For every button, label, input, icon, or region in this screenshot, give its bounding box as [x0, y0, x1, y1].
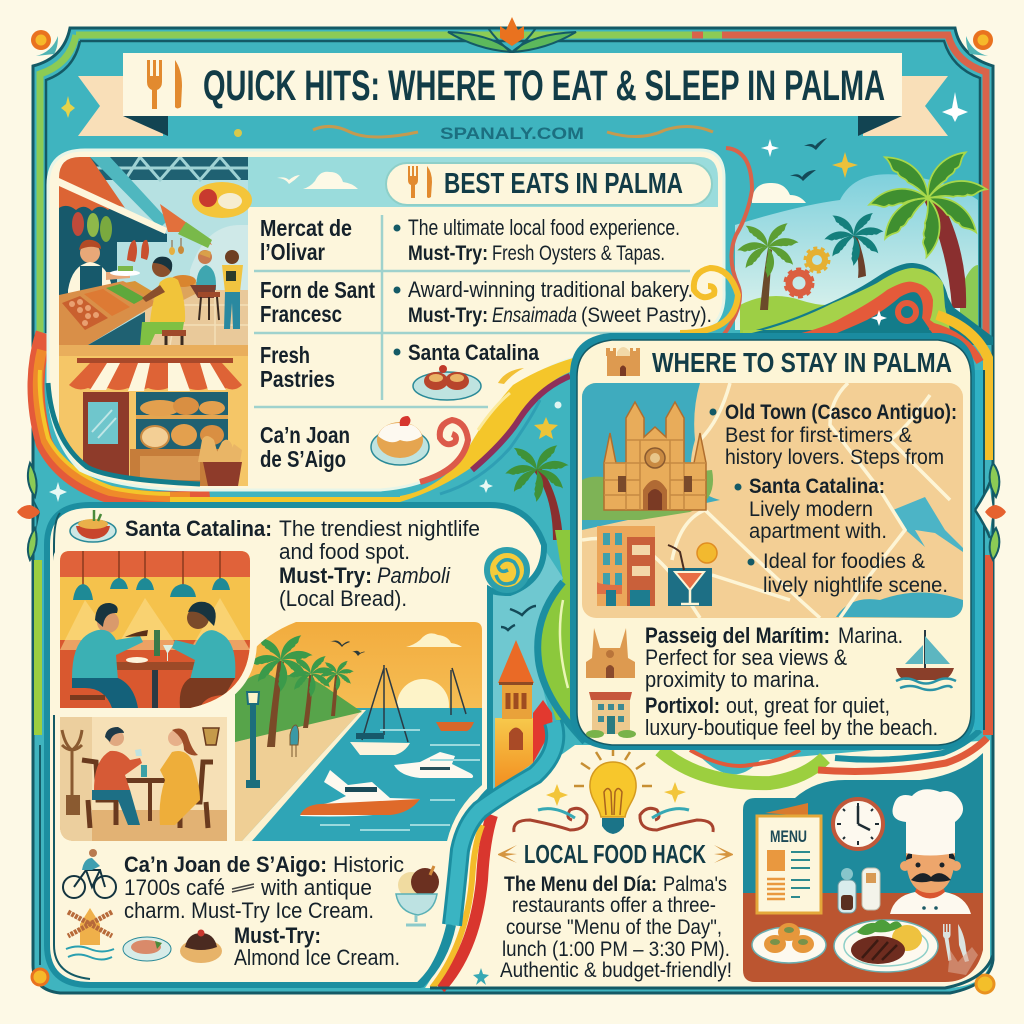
- scrollwork left: [514, 808, 587, 832]
- venue names: Ca’n Joan: [260, 422, 350, 448]
- icon: ice cream: [396, 866, 439, 925]
- ribbon tail left: [78, 76, 163, 136]
- icon: tart: [180, 930, 222, 963]
- stay text: portixol: Portixol:: [645, 693, 720, 718]
- red ribbon right of eats panel: [722, 148, 752, 337]
- venue names: Mercat de: [260, 215, 352, 241]
- stay text: old town: Best for first-timers &: [725, 424, 912, 447]
- stay text: passeig: Passeig del Marítim:: [645, 623, 830, 648]
- rainbow ribbon left and bottom of eats panel: [36, 333, 400, 500]
- icon: small house: [586, 692, 636, 738]
- outro text: ca'n joan: Almond Ice Cream.: [234, 945, 400, 970]
- venue names: de S’Aigo: [260, 446, 346, 472]
- banner: [123, 53, 902, 116]
- stay text: foodies: Ideal for foodies &: [763, 550, 925, 573]
- venue names: [260, 215, 375, 472]
- food sign: [192, 182, 252, 218]
- outro text: ca'n joan: charm. Must-Try Ice Cream.: [124, 898, 374, 923]
- corner medallion bottom right: [976, 975, 994, 993]
- dot: [554, 402, 562, 408]
- top centre ornament: [448, 17, 576, 53]
- cafe illustration: [60, 717, 227, 841]
- hack text: lunch (1:00 PM – 3:30 PM).: [502, 937, 730, 961]
- hack text: The Menu del Día:: [504, 872, 657, 896]
- scrollwork right: [640, 808, 713, 832]
- panel: where to stay: [570, 333, 975, 750]
- icon: tapas plate: [413, 365, 481, 400]
- stay text: santa catalina: apartment with.: [749, 520, 887, 543]
- harbour illustration: [235, 622, 482, 841]
- table dividers: [254, 215, 690, 407]
- panel: local food hack: [425, 730, 990, 988]
- venue descriptions: Santa Catalina: [408, 340, 540, 365]
- hack text: Palma's: [663, 872, 727, 896]
- icon: light bulb: [546, 745, 686, 834]
- icon: fork and knife: [408, 166, 432, 198]
- stay text: passeig: [645, 623, 903, 692]
- right medallion: [975, 463, 1006, 560]
- hack text: course "Menu of the Day",: [506, 915, 722, 939]
- stay text: portixol: luxury-boutique feel by the beach.: [645, 715, 938, 740]
- palm by eats panel: [504, 443, 569, 540]
- intro text: santa catalina: [125, 516, 480, 611]
- header sky band: [248, 157, 718, 207]
- icon: fork and knife: [943, 924, 969, 962]
- star: [534, 417, 558, 439]
- laurel right: [714, 845, 733, 863]
- icon: pastry: [371, 416, 429, 465]
- sky scene: palms and gears: [735, 147, 987, 335]
- stay text: santa catalina: Lively modern: [749, 498, 873, 521]
- panel background: [577, 340, 971, 745]
- panel background: [48, 150, 724, 490]
- chef illustration: [743, 750, 983, 983]
- outro text: ca'n joan: [124, 852, 404, 970]
- heading text: BEST EATS IN PALMA: [444, 168, 683, 200]
- right frame line by hack panel: [430, 737, 993, 988]
- venue descriptions: [394, 215, 712, 365]
- red swirl: [420, 420, 468, 482]
- venue descriptions: Award-winning traditional bakery.: [408, 277, 693, 302]
- left ribbon: [440, 815, 492, 988]
- restaurant illustration: [60, 551, 250, 708]
- green band: [540, 530, 573, 720]
- intro text: santa catalina: Must-Try:: [279, 563, 372, 588]
- heading pill: best eats: [386, 163, 712, 205]
- stay text: old town: Old Town (Casco Antiguo):: [725, 401, 957, 424]
- icon: cyclist: [63, 849, 116, 898]
- market illustration: [59, 157, 248, 345]
- intro text: santa catalina: Pamboli: [377, 563, 451, 588]
- right ribbon beside stay panel: [930, 315, 988, 735]
- icon: cocktail: [668, 543, 717, 606]
- flourish teal: [538, 809, 689, 818]
- venue names: Francesc: [260, 301, 342, 327]
- icon: small cathedral: [586, 628, 635, 678]
- stay text: old town: history lovers. Steps from: [725, 446, 944, 469]
- small star: [473, 968, 489, 985]
- stay text: passeig: Marina.: [838, 623, 903, 648]
- venue names: Pastries: [260, 366, 335, 392]
- panel inner curve: [48, 383, 200, 484]
- light streak: [560, 600, 568, 688]
- birds: [501, 606, 536, 630]
- intro text: santa catalina: and food spot.: [279, 539, 410, 564]
- icon: clock: [833, 799, 883, 849]
- stay text: santa catalina: Santa Catalina:: [749, 475, 885, 498]
- venue names: Fresh: [260, 342, 310, 368]
- small sparkle: [479, 479, 493, 493]
- heading: where to stay: WHERE TO STAY IN PALMA: [652, 347, 952, 378]
- icon: cathedral: [604, 402, 706, 510]
- icon: steak plate: [834, 920, 938, 972]
- heading: local food hack: LOCAL FOOD HACK: [524, 839, 706, 869]
- outro text: ca'n joan: with antique: [260, 875, 372, 900]
- faint watermark: [948, 947, 978, 975]
- icon: menu: MENU: [770, 827, 807, 846]
- outro text: ca'n joan: Ca’n Joan de S’Aigo:: [124, 852, 327, 877]
- sparkle lower left: [49, 482, 67, 502]
- stay text: passeig: Perfect for sea views &: [645, 645, 847, 670]
- icon: sailboat: [896, 630, 956, 690]
- icon: menu: [757, 803, 821, 913]
- outro text: ca'n joan: Historic: [333, 852, 404, 877]
- site name: SPANALY.COM: [440, 124, 584, 143]
- icon: fork and knife: [147, 60, 182, 109]
- swirl: [487, 550, 527, 590]
- ribbon fold right: [858, 116, 902, 136]
- intro text: santa catalina: Santa Catalina:: [125, 516, 272, 541]
- sparkles and birds in the sky: [61, 92, 968, 181]
- venue descriptions: Ensaimada: [492, 304, 577, 327]
- stay text: foodies: [748, 550, 948, 597]
- sky column: [490, 550, 563, 797]
- stay text: old town: [710, 401, 957, 469]
- panel background: [425, 740, 990, 988]
- lower teal wave: [420, 722, 555, 985]
- laurel left: [498, 845, 517, 863]
- intro text: santa catalina: (Local Bread).: [279, 586, 407, 611]
- corner ornament: right: [966, 30, 993, 56]
- ribbon tail right: [863, 76, 948, 136]
- hack text: restaurants offer a three-: [512, 893, 716, 917]
- right side waves: [728, 263, 993, 345]
- icon: apartment building: [597, 526, 655, 606]
- icon: pepper and salt: [838, 868, 880, 913]
- bakery illustration: [59, 345, 248, 486]
- hack text: Authentic & budget-friendly!: [500, 958, 732, 982]
- venue names: l’Olivar: [260, 239, 325, 265]
- panel: santa catalina and ca'n joan: [47, 505, 544, 985]
- yellow wave from eats panel to stay panel: [400, 358, 573, 502]
- icon: pastry plate: [752, 923, 826, 963]
- left medallion: [17, 463, 40, 560]
- stay text: foodies: lively nightlife scene.: [763, 574, 948, 597]
- stay text: portixol: out, great for quiet,: [726, 693, 890, 718]
- stay text: santa catalina: [734, 475, 887, 543]
- intro text: santa catalina: The trendiest nightlife: [279, 516, 480, 541]
- venue descriptions: The ultimate local food experience.: [408, 215, 680, 240]
- venue descriptions: (Sweet Pastry).: [581, 304, 712, 327]
- corner ornament: left: [31, 30, 58, 56]
- outro text: ca'n joan: Must-Try:: [234, 923, 321, 948]
- icon: dish: [70, 510, 116, 542]
- icon: fish plate: [123, 937, 171, 961]
- cloud and gull: [277, 172, 358, 189]
- icon: castle: [606, 347, 640, 376]
- tower strip: [490, 530, 585, 797]
- site name: [313, 124, 713, 143]
- bottom left medallion: [32, 969, 48, 985]
- icon: chef: [890, 789, 971, 914]
- small yellow leaf: [498, 368, 524, 384]
- outro text: ca'n joan: 1700s café: [124, 875, 225, 900]
- hack text: [500, 872, 732, 982]
- ribbon fold left: [123, 116, 168, 136]
- yellow swirl at table corner: [680, 268, 738, 333]
- icon: windmill: [66, 908, 114, 960]
- inner wave: [538, 582, 585, 742]
- panel border: [570, 333, 975, 750]
- venue descriptions: Must-Try:: [408, 242, 488, 265]
- panel background: [47, 505, 544, 985]
- map: [582, 383, 963, 618]
- venue descriptions: Must-Try:: [408, 304, 488, 327]
- stay text: portixol: [645, 693, 938, 740]
- panel inner line: [54, 513, 90, 979]
- venue names: Forn de Sant: [260, 277, 375, 303]
- stay text: passeig: proximity to marina.: [645, 667, 820, 692]
- venue descriptions: Fresh Oysters & Tapas.: [492, 242, 665, 265]
- green and red wave under stay panel: [660, 730, 987, 783]
- tower: [495, 640, 553, 790]
- panel: best eats: [48, 150, 724, 490]
- title banner: [78, 53, 948, 136]
